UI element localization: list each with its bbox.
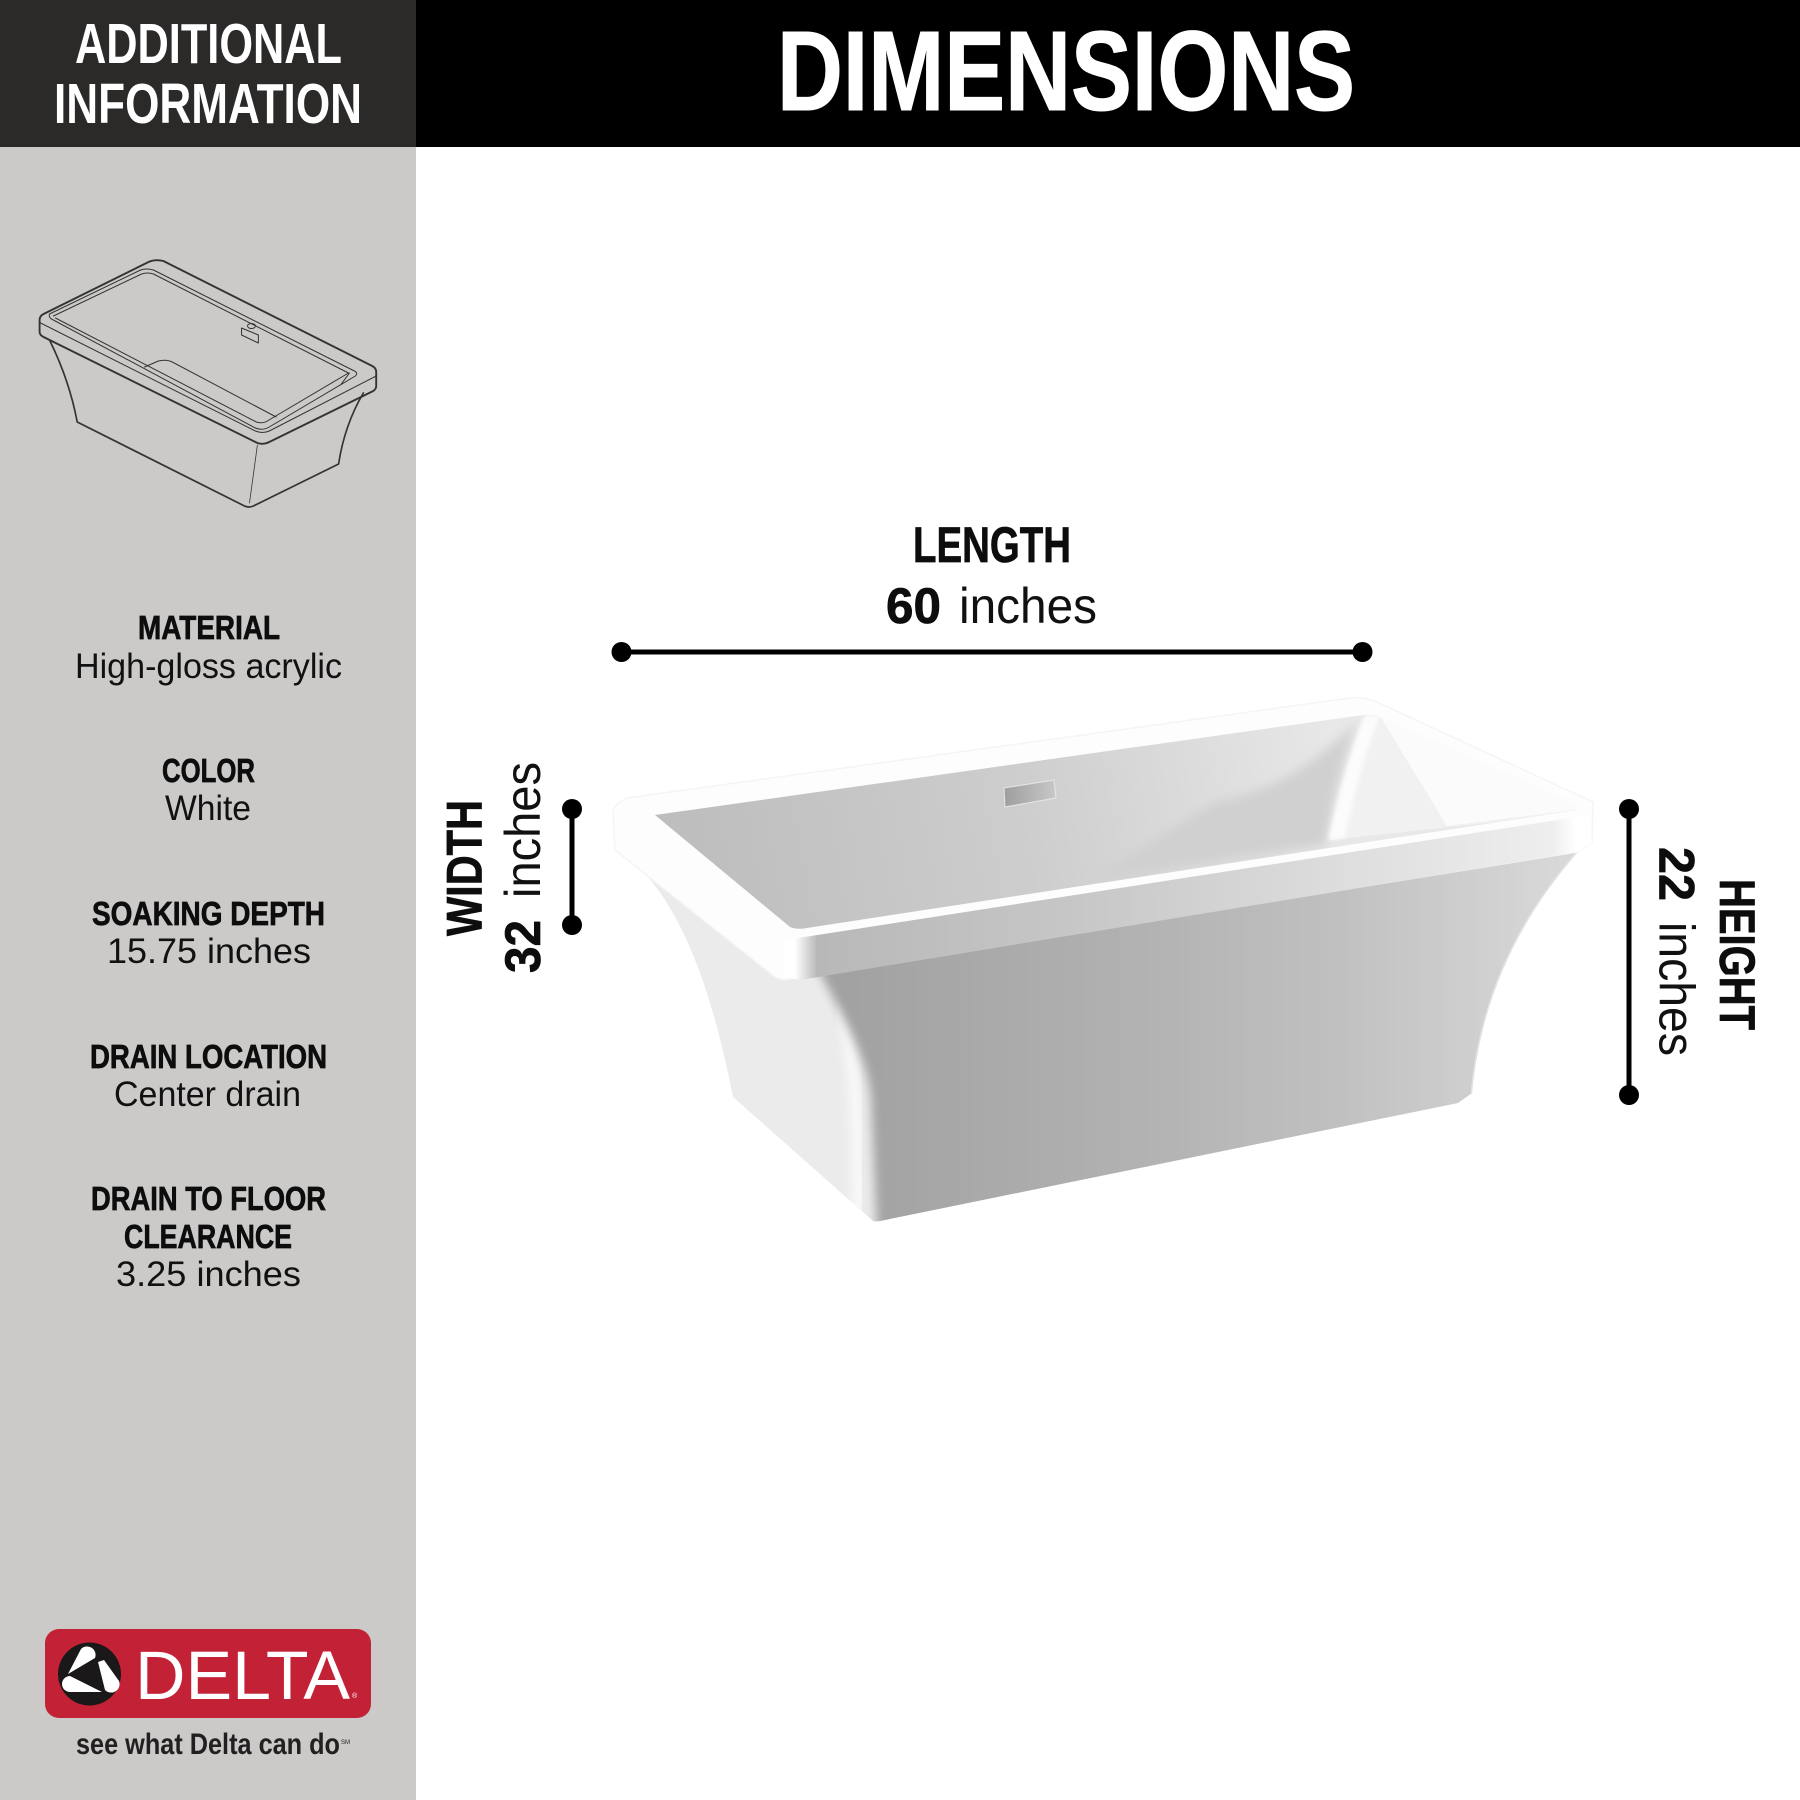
arrow: height dimension line: [1619, 799, 1639, 1105]
icon: bathtub line drawing: [40, 260, 376, 507]
tagline: SM: [341, 1740, 350, 1746]
label: height: inches: [1648, 922, 1704, 1056]
spec: drain to floor clearance: DRAIN TO FLOOR: [91, 1180, 326, 1217]
spec: drain location: Center drain: [114, 1075, 301, 1114]
sidebar heading: additional information: ADDITIONAL: [75, 12, 342, 76]
spec: material: [75, 609, 342, 686]
spec: drain to floor clearance: CLEARANCE: [124, 1218, 292, 1255]
sidebar heading: additional information: [54, 12, 362, 136]
spec: soaking depth: SOAKING DEPTH: [92, 895, 325, 932]
label: width: [436, 762, 551, 973]
spec: drain location: DRAIN LOCATION: [90, 1038, 327, 1075]
overflow plate: [1004, 780, 1056, 807]
tub front rim band: [785, 815, 1592, 980]
spec: material: High-gloss acrylic: [75, 647, 342, 686]
sidebar panel: [0, 147, 416, 1800]
label: width: 32: [495, 920, 551, 973]
spec: soaking depth: [92, 895, 325, 971]
spec: drain location: [90, 1038, 327, 1114]
label: width: inches: [495, 762, 551, 898]
label: length: inches: [959, 578, 1097, 634]
label: height: [1648, 847, 1765, 1056]
spec: color: White: [165, 789, 251, 828]
sidebar heading: additional information: INFORMATION: [54, 72, 362, 136]
label: width: WIDTH: [436, 800, 492, 936]
spec: material: MATERIAL: [138, 609, 280, 646]
label: length: [886, 517, 1097, 634]
spec: soaking depth: 15.75 inches: [107, 932, 311, 971]
tub rim top: [613, 698, 1593, 980]
title: dimensions: DIMENSIONS: [777, 8, 1355, 134]
logo: delta: DELTA: [135, 1637, 350, 1714]
tagline: see what Delta can do: [76, 1728, 340, 1761]
arrow: width dimension line: [562, 799, 582, 935]
spec: drain to floor clearance: 3.25 inches: [116, 1255, 301, 1294]
label: height: HEIGHT: [1709, 879, 1765, 1030]
sidebar header bar: [0, 0, 416, 147]
label: height: 22: [1648, 847, 1704, 901]
spec: color: COLOR: [162, 752, 255, 789]
tub interior: [655, 714, 1576, 929]
arrow: length dimension line: [612, 642, 1372, 662]
logo: delta: [45, 1629, 371, 1718]
title bar: [416, 0, 1800, 147]
bathtub photo: [612, 698, 1594, 1222]
spec: drain to floor clearance: [91, 1180, 326, 1294]
spec: color: [162, 752, 255, 828]
label: length: LENGTH: [913, 517, 1071, 573]
logo: delta: ®: [352, 1692, 358, 1700]
label: length: 60: [886, 578, 941, 634]
